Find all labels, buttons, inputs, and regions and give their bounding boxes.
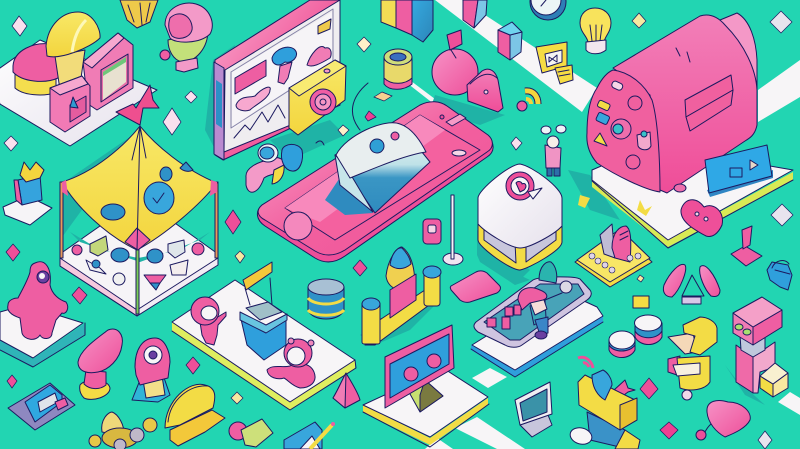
mailbox platform xyxy=(592,145,793,248)
top-left platform group xyxy=(0,12,157,146)
lamp stem xyxy=(55,50,85,90)
light bulb xyxy=(580,8,611,54)
monster platform xyxy=(0,305,85,367)
triangle wings xyxy=(663,264,720,304)
blue device tile xyxy=(8,383,75,430)
slot xyxy=(685,75,733,131)
pink frame xyxy=(83,33,133,110)
prisms xyxy=(463,0,522,60)
yellow shell xyxy=(165,384,225,446)
gamepads xyxy=(246,141,324,192)
wifi icon xyxy=(517,91,538,111)
database cylinder xyxy=(308,279,344,319)
small lock xyxy=(423,219,441,244)
lamp post xyxy=(443,195,463,265)
monitor xyxy=(214,0,340,160)
small crate on tile xyxy=(3,162,52,225)
pink tile small xyxy=(731,226,762,266)
fin xyxy=(720,13,757,95)
yellow robot xyxy=(668,317,717,400)
wifi machine xyxy=(578,357,640,449)
road strips xyxy=(407,0,800,449)
tent poles xyxy=(60,182,218,314)
tent floor xyxy=(60,198,218,316)
booth sign xyxy=(243,262,272,290)
front badges xyxy=(594,80,651,169)
camera xyxy=(289,60,346,135)
chef figure xyxy=(541,125,566,176)
sketch elements xyxy=(272,47,297,65)
robot totem xyxy=(132,338,170,402)
gear cluster xyxy=(89,412,157,449)
yellow card and note xyxy=(536,42,573,84)
yellow block xyxy=(575,224,652,287)
small yellow card xyxy=(633,296,649,308)
column xyxy=(736,345,753,393)
monster xyxy=(8,262,68,339)
blue card xyxy=(705,145,773,197)
booth poles xyxy=(245,278,272,305)
long white platform xyxy=(172,262,356,410)
small screen xyxy=(515,382,552,437)
tent xyxy=(60,126,218,316)
tray xyxy=(474,277,591,347)
pink ball with flag xyxy=(432,30,478,95)
front xyxy=(587,70,660,192)
lamp cap xyxy=(46,12,100,57)
green tile xyxy=(229,419,273,447)
floor items xyxy=(72,236,204,290)
neck xyxy=(740,335,765,357)
pink robot xyxy=(733,297,788,397)
pink pill tile xyxy=(450,271,500,302)
bear right xyxy=(267,338,315,388)
bolts xyxy=(578,195,652,216)
platform xyxy=(0,40,157,146)
heart fan xyxy=(696,401,750,440)
clock xyxy=(530,0,566,20)
roof spots xyxy=(101,204,125,220)
shadows xyxy=(60,45,765,405)
phone xyxy=(257,102,493,262)
booth basket xyxy=(246,302,282,320)
body xyxy=(613,15,757,193)
connector machine xyxy=(362,247,441,345)
burger xyxy=(13,44,58,95)
heart xyxy=(681,200,723,237)
blue bag xyxy=(767,261,792,290)
left cylinder xyxy=(609,331,635,358)
yellow cube xyxy=(760,376,773,397)
pink mushroom xyxy=(78,329,122,399)
box stack top xyxy=(381,0,433,42)
bed platform xyxy=(471,262,603,377)
boxes xyxy=(487,318,496,327)
pink bulb character xyxy=(160,3,212,72)
tent roof xyxy=(62,126,217,250)
phone stand xyxy=(325,83,430,215)
screen stand xyxy=(405,380,443,412)
character xyxy=(530,300,546,325)
cupcake top xyxy=(120,0,158,28)
white egg xyxy=(568,425,594,447)
screen xyxy=(385,325,454,408)
pink cube xyxy=(50,76,90,132)
bag xyxy=(467,69,503,112)
bear left xyxy=(191,297,226,345)
white hex cube xyxy=(477,164,562,285)
dome xyxy=(539,262,557,283)
mailbox xyxy=(587,13,757,193)
right cylinder xyxy=(634,315,662,344)
pencil book xyxy=(284,422,335,449)
head xyxy=(733,313,753,345)
flag xyxy=(116,85,159,125)
monitor platform xyxy=(363,325,489,447)
cone xyxy=(333,373,360,408)
jar xyxy=(384,49,412,89)
chart panel xyxy=(235,60,266,94)
